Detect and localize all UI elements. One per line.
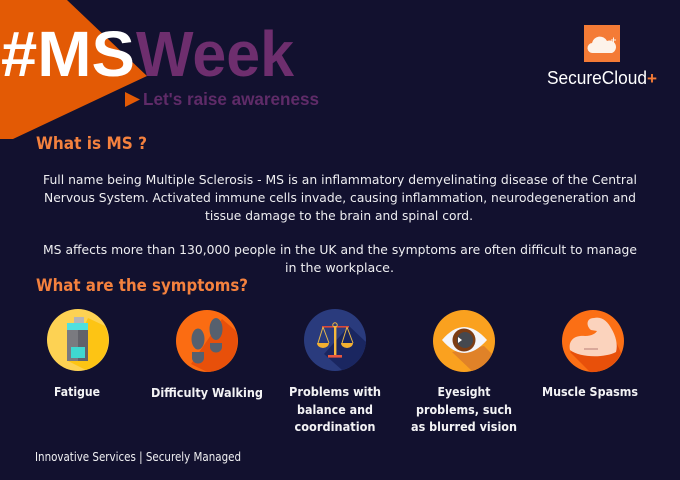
label: eyesight problems (411, 385, 517, 434)
heading: What are the symptoms?: What are the symptoms? (36, 276, 248, 296)
text block: MS in the UK (43, 242, 637, 275)
heading: What is MS?: What is MS ? (36, 134, 147, 154)
title: #MSWeek (1, 18, 294, 90)
text block: definition of MS: Full name being Multiple Sclerosis - MS is an inflammatory demyelinating disease of the Central (43, 172, 637, 187)
label: eyesight problems: problems, such (416, 403, 512, 417)
label: balance problems: balance and (297, 403, 373, 417)
logo: SecureCloud+: SecureCloud (547, 68, 647, 88)
icon: eye (433, 310, 495, 372)
header banner: orange arrow shape (0, 0, 147, 139)
label: Muscle Spasms: Muscle Spasms (542, 385, 638, 399)
label: Fatigue: Fatigue (54, 385, 100, 399)
text block: MS in the UK: in the workplace. (285, 260, 394, 275)
icon: fatigue battery (47, 309, 109, 371)
icon: balance scales (304, 309, 366, 371)
label: balance problems: Problems with (289, 385, 381, 399)
text block: definition of MS: Nervous System. Activated immune cells invade, causing inflammation, neurodegeneration and (44, 190, 636, 205)
title: #MSWeek: Week (136, 18, 294, 90)
icon: footprints (176, 310, 238, 372)
title: #MSWeek: #MS (1, 18, 135, 90)
label: eyesight problems: Eyesight (438, 385, 491, 399)
text block: definition of MS: tissue damage to the brain and spinal cord. (205, 208, 473, 223)
label: Difficulty Walking: Difficulty Walking (151, 386, 263, 400)
text block: definition of MS (43, 172, 637, 223)
text block: MS in the UK: MS affects more than 130,000 people in the UK and the symptoms are often difficult to manage (43, 242, 637, 257)
label: eyesight problems: as blurred vision (411, 420, 517, 434)
footer strapline: Innovative Services | Securely Managed (35, 450, 241, 464)
label: balance problems (289, 385, 381, 434)
logo: SecureCloud+ (547, 25, 657, 88)
icon: flexed muscle arm (562, 310, 624, 372)
logo: SecureCloud+: + (647, 69, 657, 88)
label: balance problems: coordination (294, 420, 376, 434)
tagline: Let's raise awareness: Let's raise awareness (143, 89, 319, 109)
